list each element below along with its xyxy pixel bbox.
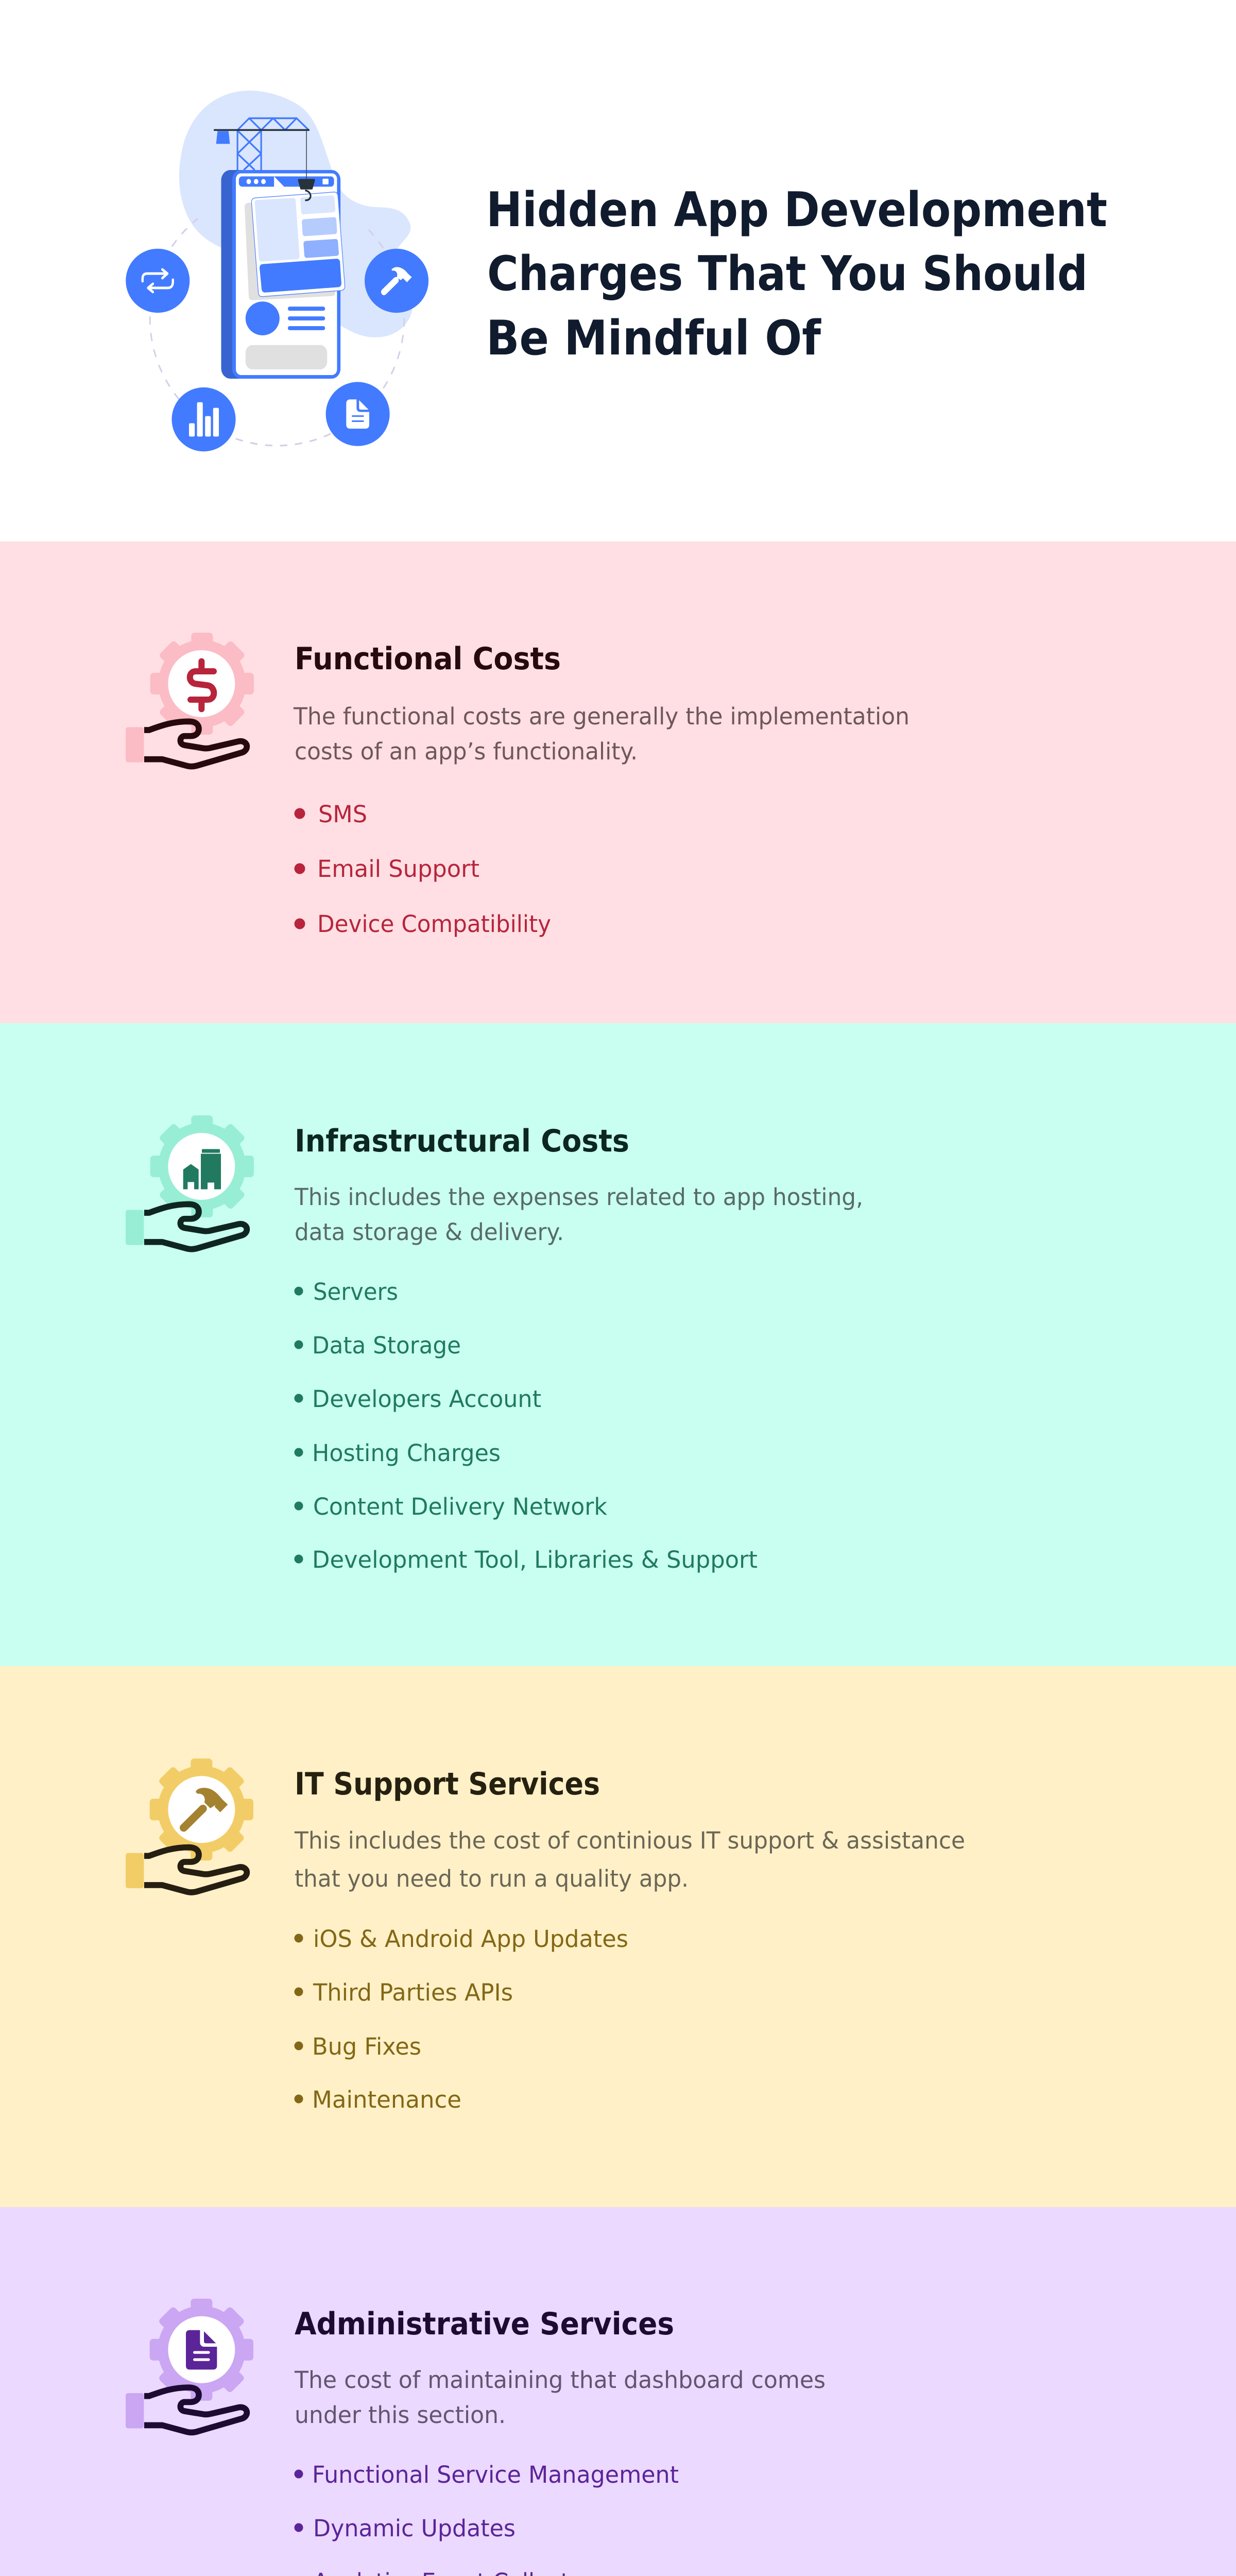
bullet list (295, 801, 551, 938)
bullet list: Functional Service Management (312, 2461, 679, 2488)
panel: administrative services (0, 2207, 1236, 2576)
heading: Functional Costs (295, 641, 561, 677)
title: Hidden App Development (486, 182, 1107, 238)
heading: IT Support Services (295, 1766, 600, 1802)
crane hook (299, 130, 314, 200)
icon: hand holding gear with dollar (126, 633, 254, 767)
hero illustration: app under construction (126, 91, 428, 451)
bullet list: Bug Fixes (312, 2033, 421, 2060)
description (294, 1827, 965, 1892)
bullet list: Device Compatibility (317, 910, 551, 938)
panel: IT support services (0, 1666, 1236, 2207)
heading: Infrastructural Costs (295, 1123, 629, 1159)
icon: document (326, 382, 390, 446)
description: costs of an app’s functionality. (295, 738, 638, 765)
icon: hammer (365, 249, 428, 313)
icon: swap arrows (126, 249, 190, 313)
bullet list: Developers Account (312, 1385, 541, 1413)
description (294, 1183, 863, 1246)
icon: bar chart (171, 387, 236, 451)
bullet list (295, 1925, 628, 2113)
bullet list: Data Storage (312, 1332, 461, 1359)
description (294, 2366, 826, 2429)
crane (215, 118, 309, 170)
phone (221, 170, 340, 379)
bullet list: Dynamic Updates (313, 2515, 516, 2542)
description: The functional costs are generally the implementation (293, 703, 909, 730)
icon: hand holding gear with document (126, 2299, 253, 2432)
bullet list: Content Delivery Network (313, 1493, 607, 1520)
description: This includes the cost of continious IT support & assistance (294, 1827, 965, 1854)
description: The cost of maintaining that dashboard comes (294, 2366, 826, 2394)
description: under this section. (295, 2401, 506, 2429)
bullet list: Third Parties APIs (313, 1979, 513, 2006)
description (293, 703, 909, 765)
title (486, 182, 1107, 366)
bullet list (295, 2461, 679, 2576)
bullet list: Maintenance (312, 2086, 461, 2113)
bullet list: Servers (313, 1278, 398, 1306)
heading: Administrative Services (295, 2306, 674, 2342)
panel: infrastructural costs (0, 1023, 1236, 1666)
dashed orbit (150, 219, 404, 446)
title: Charges That You Should (487, 246, 1088, 301)
icon: hand holding gear with buildings (126, 1115, 254, 1249)
panel: functional costs (0, 541, 1236, 1023)
icon: hand holding gear with hammer (126, 1758, 253, 1892)
bullet list: Hosting Charges (312, 1439, 501, 1467)
title: Be Mindful Of (486, 310, 821, 366)
floating card (251, 192, 345, 297)
background blob (179, 91, 412, 337)
bullet list: iOS & Android App Updates (313, 1925, 628, 1953)
bullet list (295, 1278, 758, 1573)
description: data storage & delivery. (295, 1218, 564, 1246)
bullet list: Email Support (317, 855, 479, 883)
bullet list: SMS (318, 801, 367, 828)
description: that you need to run a quality app. (295, 1865, 689, 1892)
bullet list: Development Tool, Libraries & Support (312, 1546, 758, 1573)
description: This includes the expenses related to app hosting, (294, 1183, 863, 1211)
